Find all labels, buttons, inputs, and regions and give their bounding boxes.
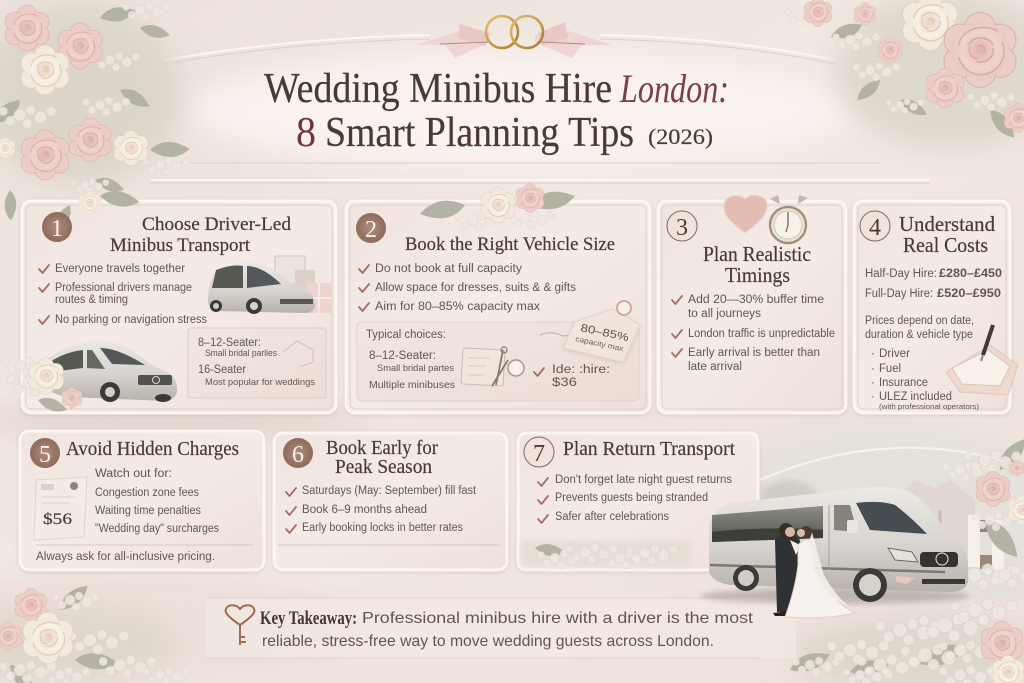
title: 8 — [296, 110, 316, 156]
included list: Insurance — [879, 377, 928, 389]
watch-out list: Watch out for: — [95, 468, 172, 480]
typical choices box: Typical choices: — [366, 329, 446, 341]
checklist 3: Add 20—30% buffer time — [688, 294, 824, 306]
badge 3 — [667, 211, 697, 241]
scenic backdrop with building — [760, 447, 1024, 600]
checklist 6: Saturdays (May: September) fill fast — [302, 485, 477, 497]
watch-out list: Waiting time penalties — [95, 505, 201, 517]
heading 7: Plan Return Transport — [563, 438, 735, 460]
included list: ULEZ included — [879, 391, 952, 403]
small van — [208, 263, 315, 314]
checklist 2: Allow space for dresses, suits & & gifts — [375, 282, 576, 294]
checklist 7 — [538, 474, 732, 523]
capacity tag — [540, 301, 640, 362]
price list: Full-Day Hire: — [865, 288, 933, 300]
title: Smart Planning Tips — [325, 110, 634, 156]
included list: · — [871, 363, 875, 375]
heading 6 — [326, 437, 438, 478]
checklist 7: Safer after celebrations — [555, 511, 669, 523]
included list: · — [871, 391, 875, 403]
title — [264, 66, 729, 156]
checklist 6: Early booking locks in better rates — [302, 522, 463, 534]
icon: card, scissors and magnifier — [461, 347, 524, 386]
seat sizes box: Most popular for weddings — [205, 377, 315, 388]
key takeaway banner — [206, 598, 796, 658]
heading 4: Real Costs — [903, 233, 988, 257]
checklist 3 — [672, 294, 835, 373]
icon: heart — [724, 195, 767, 233]
capacity tag: capacity max — [575, 334, 625, 353]
heading 1 — [110, 214, 292, 256]
price list: duration & vehicle type — [865, 329, 973, 341]
seat sizes box: Small bridal parlies — [205, 348, 277, 358]
included list: Fuel — [879, 363, 901, 375]
heading 6: Book Early for — [326, 437, 438, 459]
badge 7: 7 — [533, 441, 545, 467]
checklist 7: Don't forget late night guest returns — [555, 474, 732, 486]
heading 3: Timings — [725, 263, 790, 287]
icon: gift boxes — [275, 256, 331, 313]
checklist 3: Early arrival is better than — [688, 347, 820, 359]
receipt with price — [34, 477, 87, 540]
included list: · — [871, 377, 875, 389]
included list: Driver — [879, 348, 910, 360]
takeaway text: Professional minibus hire with a driver is the most — [362, 610, 754, 627]
heading 3 — [703, 242, 811, 287]
price list: £520–£950 — [937, 288, 1001, 300]
panel 3: plan realistic timings — [658, 195, 846, 413]
header arch lines — [150, 35, 930, 183]
heading 6: Peak Season — [335, 456, 432, 478]
badge 5: 5 — [39, 442, 51, 468]
florals: bottom left — [0, 583, 190, 683]
bride and groom — [773, 523, 856, 618]
pricing note: Always ask for all-inclusive pricing. — [36, 551, 215, 563]
checklist 1: Professional drivers manage — [55, 282, 192, 294]
seat sizes box: 16-Seater — [198, 364, 246, 376]
checklist 3: to all journeys — [688, 308, 761, 320]
included list — [871, 348, 980, 411]
badge 3: 3 — [676, 215, 688, 241]
icon: alarm clock — [770, 195, 808, 243]
checklist 3: London traffic is unpredictable — [688, 328, 835, 340]
panel 4: understand real costs — [854, 201, 1018, 413]
heading 4: Understand — [899, 212, 995, 236]
watch-out list — [95, 468, 219, 535]
flowers in panel 7 — [521, 540, 691, 569]
seat sizes box — [188, 328, 326, 398]
title: London: — [619, 66, 729, 111]
receipt with price: $56 — [43, 511, 72, 528]
heading 1: Choose Driver-Led — [142, 214, 292, 235]
title: Wedding Minibus Hire — [264, 66, 612, 112]
checklist 7: Prevents guests being stranded — [555, 492, 708, 504]
panel 7: plan return transport — [518, 433, 758, 570]
badge 1: 1 — [51, 216, 63, 242]
florals: top right — [784, 0, 1024, 150]
heading 2: Book the Right Vehicle Size — [405, 234, 615, 255]
typical choices box — [357, 322, 639, 401]
badge 6 — [283, 438, 313, 468]
badge 2: 2 — [365, 217, 377, 243]
florals: bottom right — [788, 599, 1024, 683]
title: (2026) — [648, 124, 713, 149]
checklist 6: Book 6–9 months ahead — [302, 504, 427, 516]
heading 3: Plan Realistic — [703, 242, 811, 266]
seat sizes box: 8–12-Seater: — [198, 337, 261, 349]
florals: right middle — [942, 436, 1024, 590]
panel 1: choose driver-led minibus transport — [2, 185, 336, 418]
panel 2: book the right vehicle size — [346, 183, 650, 413]
typical choices box: Small bridal partes — [377, 363, 455, 373]
watch-out list: "Wedding day" surcharges — [95, 523, 219, 535]
capacity tag: 80–85% — [579, 322, 630, 344]
included list: · — [871, 348, 875, 360]
heading 4 — [899, 212, 995, 257]
typical choices box: Ide: :hire: — [552, 364, 610, 376]
checklist 1 — [39, 263, 207, 326]
icon: wedding rings and ribbon — [415, 16, 612, 58]
price list: Half-Day Hire: — [865, 268, 937, 280]
panel 6: book early for peak season — [274, 433, 507, 570]
badge 7 — [524, 437, 554, 467]
checklist 2 — [359, 263, 576, 313]
badge 1 — [42, 212, 72, 242]
badge 5 — [30, 438, 60, 468]
flowers at panel 1 top — [48, 185, 141, 234]
price list: £280–£450 — [939, 268, 1002, 280]
badge 2 — [356, 213, 386, 243]
wedding minibus — [700, 487, 970, 604]
checklist 1: routes & timing — [55, 294, 128, 306]
badge 4 — [860, 211, 890, 241]
panel 5: avoid hidden charges — [20, 431, 264, 570]
checklist 2: Do not book at full capacity — [375, 263, 522, 275]
badge 6: 6 — [292, 442, 304, 468]
checklist 6 — [286, 485, 477, 534]
checklist 2: Aim for 80–85% capacity max — [375, 301, 540, 313]
takeaway text: reliable, stress-free way to move wedding guests across London. — [262, 633, 714, 650]
takeaway text — [260, 608, 754, 650]
price list — [865, 268, 1002, 341]
heading 1: Minibus Transport — [110, 235, 251, 256]
heading 5: Avoid Hidden Charges — [66, 438, 239, 460]
typical choices box: Multiple minibuses — [369, 380, 455, 391]
florals: top left — [0, 2, 190, 221]
watch-out list: Congestion zone fees — [95, 487, 199, 499]
checklist 3: late arrival — [688, 361, 742, 373]
typical choices box: 8–12-Seater: — [369, 350, 436, 362]
included list: (with professional operators) — [879, 402, 980, 411]
icon: notepad and pen — [946, 325, 1018, 395]
typical choices box: $36 — [552, 377, 577, 389]
checklist 1: Everyone travels together — [55, 263, 185, 275]
badge 4: 4 — [869, 215, 881, 241]
flowers at panel 2 top — [420, 183, 575, 231]
checklist 1: No parking or navigation stress — [55, 314, 207, 326]
takeaway text: Key Takeaway: — [260, 608, 357, 629]
large van with flowers — [2, 340, 177, 418]
price list: Prices depend on date, — [865, 315, 974, 327]
icon: heart key — [226, 605, 254, 645]
